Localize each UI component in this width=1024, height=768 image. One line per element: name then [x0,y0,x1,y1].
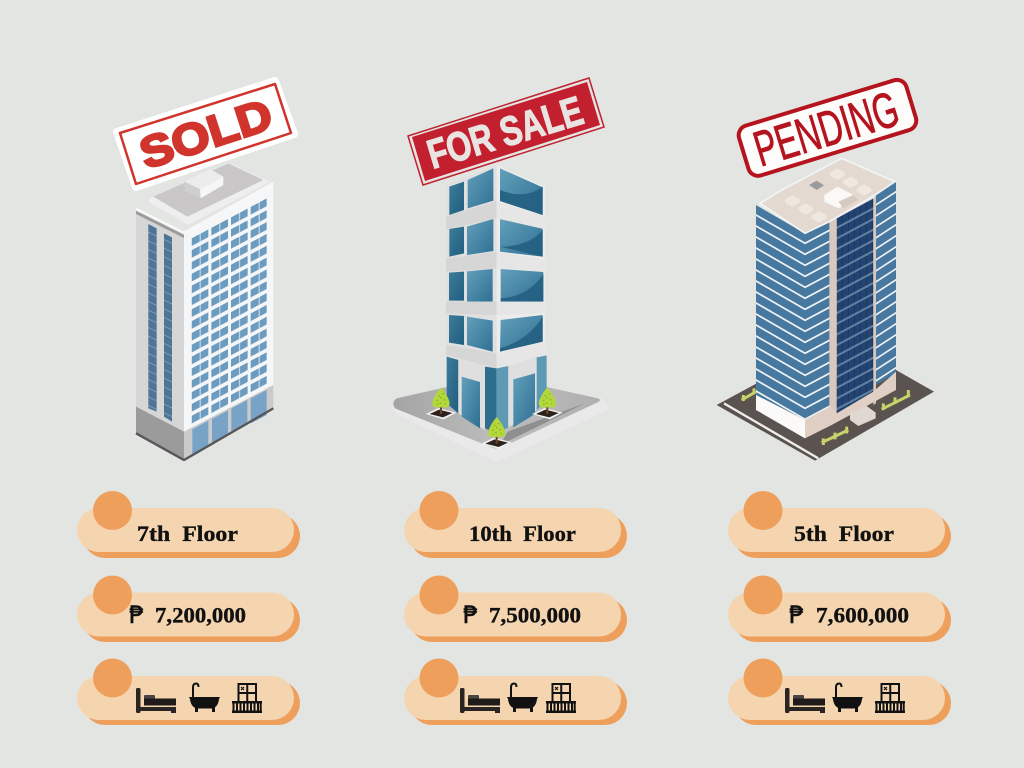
icon: bed [460,688,500,713]
column 3: amenities pill [728,658,951,725]
column 2: price pill [404,576,627,642]
sign: PENDING [736,77,919,178]
column 1: floor pill: 7th Floor [137,521,238,546]
tree: right [532,387,563,419]
hedges [742,388,910,445]
building: sold tower [136,163,273,460]
column 1: price pill: 7,200,000 [155,602,246,628]
column 3: price pill [728,576,951,642]
column 2: amenities pill [404,658,627,725]
icon: balcony [875,684,905,713]
icon: bathtub [832,684,863,712]
icon: bathtub [507,684,538,712]
sign: FOR SALE: FOR SALE [422,87,588,178]
entry canopy [850,406,876,426]
column 3: price pill: ₱ [789,601,804,629]
tree: left [426,387,456,419]
sign: SOLD: SOLD [134,90,278,179]
column 1: floor pill [77,491,300,558]
icon: bed [136,688,176,713]
icon: bathtub [189,684,220,712]
column 1: amenities pill [77,658,300,725]
icon: bed [785,688,825,713]
icon: balcony [232,684,262,713]
tree: front [481,417,512,449]
building: pending tower [717,158,934,461]
column 2: floor pill [404,491,627,558]
sign: SOLD [117,81,294,187]
column 3: price pill: 7,600,000 [816,602,909,628]
rooftop units [785,169,871,223]
ground lot [717,370,934,461]
sign: PENDING: PENDING [747,81,905,177]
column 2: price pill: ₱ [463,601,478,629]
column 2: price pill: 7,500,000 [489,602,581,628]
column 3: floor pill: 5th Floor [794,521,894,546]
column 1: price pill [77,576,300,642]
plaza [392,387,608,461]
icon: balcony [546,684,576,713]
column 3: floor pill [728,491,951,558]
column 2: floor pill: 10th Floor [469,521,576,546]
building: for sale tower [392,165,608,461]
column 1: price pill: ₱ [129,601,144,629]
